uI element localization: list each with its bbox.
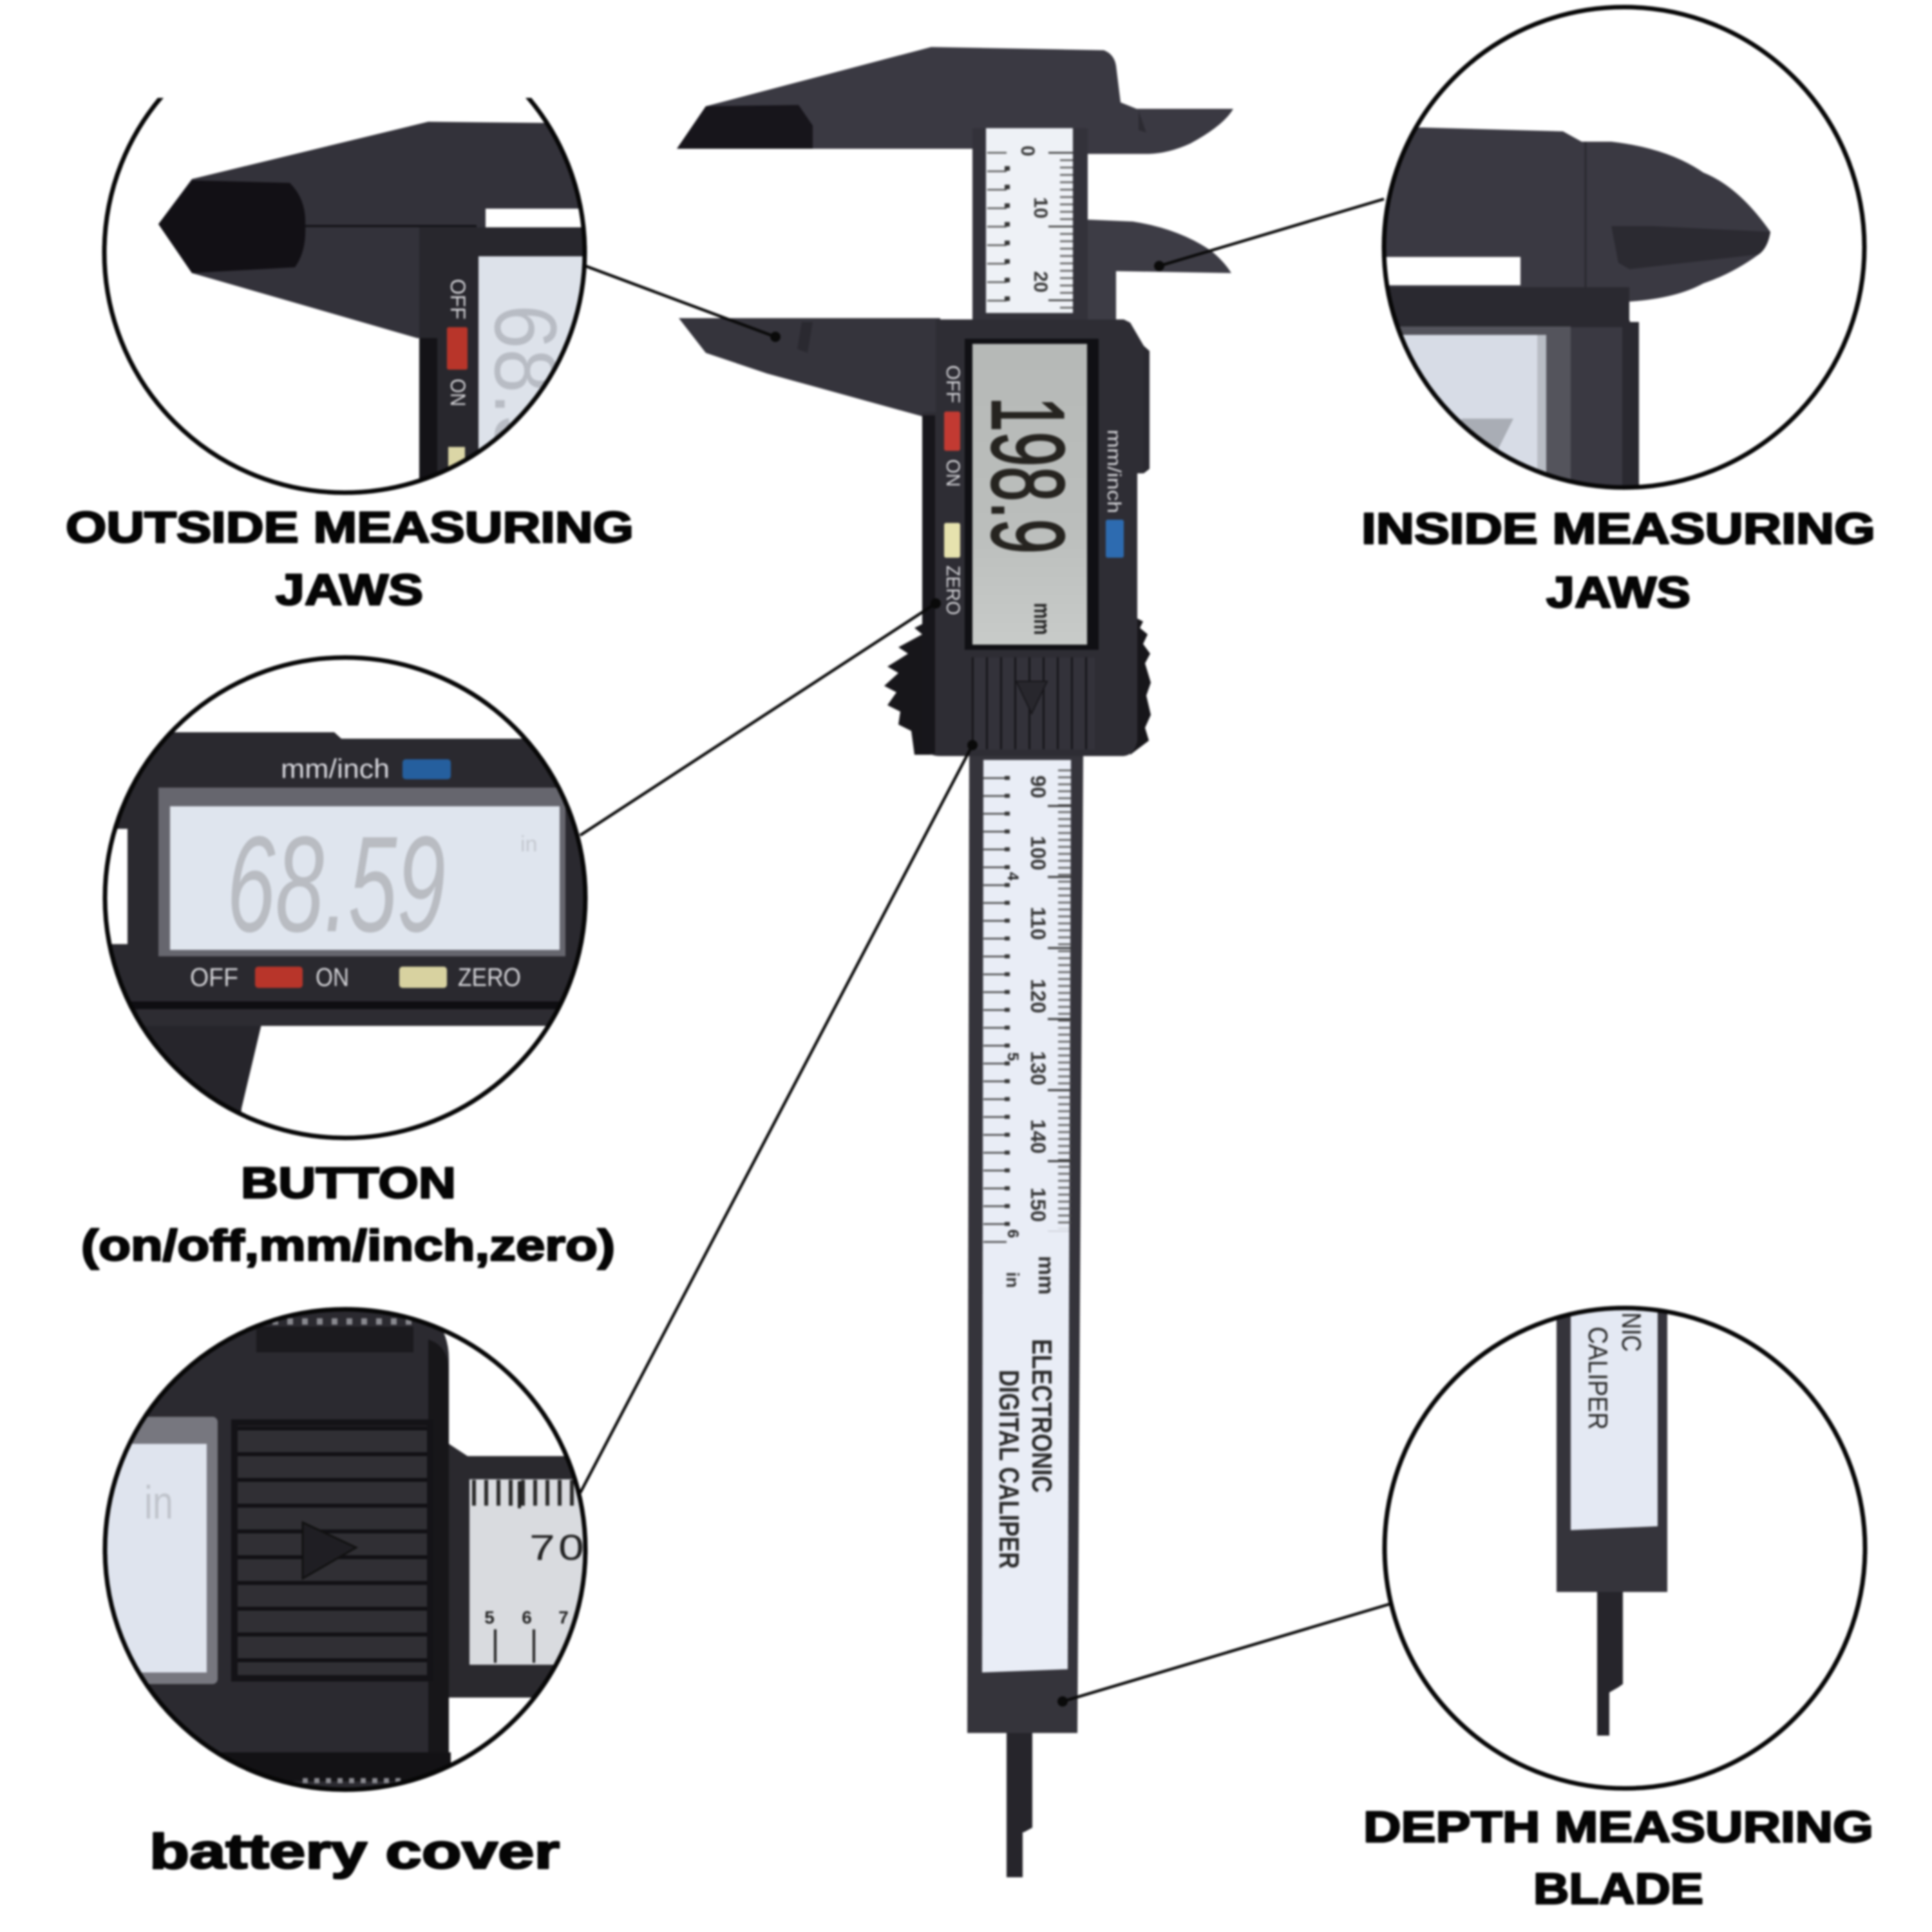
label: outside measuring jaws: OUTSIDE MEASURING bbox=[66, 503, 634, 552]
leader: button bbox=[580, 598, 941, 835]
caliper: main tool bbox=[677, 47, 1233, 1877]
seam bbox=[1584, 142, 1587, 296]
red button bbox=[255, 967, 303, 988]
depth blade bbox=[1007, 1733, 1032, 1877]
circle ring bbox=[100, 96, 589, 497]
lower jaw stub bbox=[134, 1007, 263, 1113]
circle ring bbox=[105, 658, 585, 1138]
lcd screen bbox=[1372, 335, 1541, 496]
lcd frame bbox=[965, 339, 1099, 650]
blade bbox=[1597, 1592, 1623, 1736]
text fragment nic: NIC bbox=[1616, 1312, 1647, 1352]
circle ring bbox=[1384, 7, 1864, 488]
body bottom shadow bbox=[90, 1752, 451, 1781]
label: inside measuring jaws bbox=[1361, 504, 1875, 617]
body right shadow bbox=[428, 1340, 449, 1758]
rail top bbox=[449, 1444, 589, 1479]
red button bbox=[944, 412, 960, 451]
upper jaw dark tip bbox=[677, 105, 813, 149]
yellow button bbox=[448, 447, 465, 473]
lower ruler: 120 bbox=[1027, 979, 1050, 1013]
label: inside measuring jaws: JAWS bbox=[1546, 568, 1690, 617]
zero label: ZERO bbox=[942, 565, 963, 615]
label: button bbox=[81, 1159, 615, 1270]
inch digits: 6 bbox=[522, 1607, 532, 1627]
lower ruler: 4 bbox=[1004, 872, 1021, 881]
in unit: in bbox=[520, 832, 537, 857]
body band bbox=[1372, 287, 1629, 327]
beam end bbox=[1557, 1301, 1667, 1592]
cover panel bbox=[234, 1423, 430, 1678]
lcd screen bbox=[972, 344, 1087, 645]
blue button bbox=[1106, 520, 1124, 558]
body bbox=[97, 732, 589, 1001]
jaw step mark bbox=[797, 322, 813, 353]
on label: ON bbox=[446, 379, 469, 406]
lcd screen bbox=[170, 806, 560, 950]
bottom speckle bbox=[303, 1778, 406, 1783]
battery cover bbox=[972, 658, 1095, 750]
slider body bbox=[922, 319, 1144, 756]
jaw shape bbox=[158, 122, 612, 338]
lower inside jaw bbox=[1088, 220, 1231, 322]
leader lines bbox=[580, 199, 1389, 1707]
label: depth measuring blade: BLADE bbox=[1533, 1864, 1703, 1913]
lower ruler: 130 bbox=[1027, 1051, 1050, 1085]
callout circle: inside measuring jaws bbox=[1372, 7, 1864, 502]
top speckle bbox=[258, 1318, 419, 1325]
major tick bbox=[518, 1481, 521, 1508]
mm/inch label: mm/inch bbox=[1103, 430, 1124, 513]
upper ruler bbox=[986, 128, 1073, 313]
body bbox=[90, 1301, 449, 1797]
lower ruler: in bbox=[1003, 1272, 1023, 1288]
slot bbox=[486, 209, 589, 227]
lcd screen bbox=[90, 1444, 207, 1672]
lcd digits: 68.59 bbox=[227, 808, 446, 960]
triangle mark bbox=[303, 1522, 356, 1578]
lower ruler: 110 bbox=[1027, 907, 1050, 940]
inch digits: 5 bbox=[484, 1607, 495, 1627]
callout circle: outside measuring jaws bbox=[100, 96, 589, 497]
body edge bbox=[1622, 322, 1639, 496]
on label: ON bbox=[942, 459, 963, 487]
label: inside measuring jaws: INSIDE MEASURING bbox=[1361, 504, 1875, 553]
lower ruler: mm bbox=[1034, 1256, 1058, 1294]
side button bbox=[1144, 346, 1150, 473]
upper inside jaw step bbox=[1139, 111, 1146, 133]
lower ruler: ELECTRONIC bbox=[1026, 1339, 1057, 1493]
text fragment caliper: CALIPER bbox=[1583, 1327, 1613, 1430]
lcd segment bbox=[1443, 419, 1513, 457]
inch ticks bbox=[495, 1629, 534, 1663]
jaw and body bbox=[1372, 128, 1770, 502]
scale ticks bbox=[472, 1480, 589, 1506]
lower ruler: 150 bbox=[1027, 1188, 1050, 1222]
on label: ON bbox=[316, 963, 349, 992]
lcd frame bbox=[158, 788, 565, 956]
label: depth measuring blade: DEPTH MEASURING bbox=[1363, 1803, 1873, 1852]
lower beam bbox=[967, 753, 1083, 1733]
lcd reading: 198.9 bbox=[971, 397, 1086, 554]
callout circle: button bbox=[97, 658, 592, 1146]
callout circle: depth measuring blade bbox=[1385, 1301, 1865, 1788]
label: battery cover: battery cover bbox=[149, 1824, 560, 1879]
body bbox=[417, 228, 585, 473]
leader: outside jaws bbox=[585, 266, 781, 342]
off label: OFF bbox=[942, 365, 963, 403]
red button bbox=[447, 327, 468, 370]
silver scale bbox=[449, 1479, 591, 1665]
jaw dark tip bbox=[158, 180, 305, 273]
cover outline bbox=[234, 1423, 430, 1678]
leader: battery cover bbox=[580, 740, 978, 1493]
yellow button bbox=[399, 967, 447, 988]
yellow button bbox=[944, 523, 960, 558]
lower ruler: 5 bbox=[1004, 1052, 1021, 1061]
circle ring bbox=[105, 1309, 585, 1790]
lower ruler: 90 bbox=[1027, 775, 1050, 799]
lower ruler: DIGITAL CALIPER bbox=[993, 1370, 1025, 1569]
lower ruler: 100 bbox=[1027, 836, 1050, 870]
movable outside jaw bbox=[679, 318, 940, 419]
inch digits bbox=[484, 1607, 569, 1627]
top recess bbox=[256, 1327, 413, 1352]
leader: inside jaws bbox=[1154, 199, 1384, 271]
right thumb wheel bbox=[1130, 615, 1151, 755]
lcd unit: mm bbox=[1029, 603, 1056, 635]
circle ring bbox=[1385, 1308, 1865, 1788]
slot bbox=[1372, 257, 1520, 285]
side slot bbox=[106, 827, 129, 946]
upper ruler: 0 bbox=[1017, 146, 1038, 156]
lcd frame bbox=[1372, 327, 1571, 494]
lcd frame bbox=[90, 1417, 218, 1684]
zero label: ZERO bbox=[458, 963, 521, 992]
leader: depth blade bbox=[1057, 1604, 1389, 1707]
rail under body bbox=[260, 1007, 556, 1028]
callout circle: battery cover bbox=[90, 1301, 591, 1797]
lower ruler: 140 bbox=[1027, 1119, 1050, 1153]
left thumb wheel bbox=[884, 615, 940, 755]
label: button: BUTTON bbox=[241, 1159, 456, 1208]
blue button bbox=[402, 759, 451, 779]
label: button: (on/off,mm/inch,zero) bbox=[81, 1221, 615, 1270]
jaw lower facet bbox=[1611, 226, 1770, 269]
slider left shadow bbox=[922, 415, 935, 753]
cover ribs bbox=[237, 1426, 428, 1676]
upper ruler: 20 bbox=[1030, 271, 1051, 292]
lower ruler: 6 bbox=[1004, 1229, 1021, 1238]
lcd digits: 68.5 bbox=[476, 305, 574, 459]
scale number: 70 bbox=[529, 1527, 587, 1567]
scale end bbox=[1571, 1301, 1658, 1530]
off label: OFF bbox=[446, 279, 469, 319]
lower ruler bbox=[982, 760, 1071, 1672]
off label: OFF bbox=[190, 963, 238, 992]
label: outside measuring jaws: JAWS bbox=[276, 565, 423, 614]
inch digits: 7 bbox=[558, 1607, 569, 1627]
upper beam bbox=[972, 128, 1088, 322]
upper ruler: 10 bbox=[1030, 197, 1051, 218]
label: depth measuring blade bbox=[1363, 1803, 1873, 1913]
upper fixed jaw bbox=[677, 47, 1233, 193]
label: outside measuring jaws bbox=[66, 503, 634, 614]
in unit: in bbox=[144, 1477, 173, 1529]
mm/inch label: mm/inch bbox=[281, 753, 390, 784]
lcd bbox=[477, 255, 584, 450]
rail bottom bbox=[449, 1665, 589, 1698]
jaw split line bbox=[305, 225, 477, 227]
